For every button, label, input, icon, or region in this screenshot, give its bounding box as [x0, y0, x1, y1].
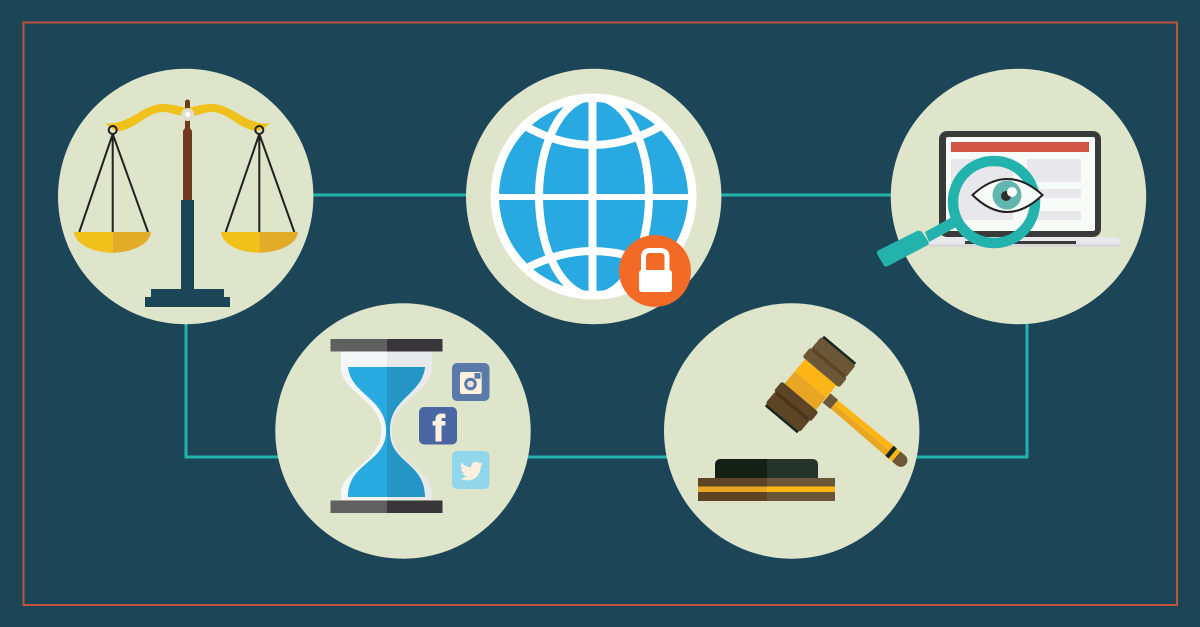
connector lines: [186, 195, 1027, 457]
scales stand: [145, 200, 230, 307]
globe: [490, 90, 697, 305]
laptop base: [928, 237, 1120, 247]
panel: globe with lock: [466, 69, 721, 324]
gavel hammer: [763, 334, 935, 500]
gavel handle: [822, 393, 910, 470]
scales post: [183, 100, 192, 200]
panel: hourglass and social media: [275, 303, 531, 559]
gavel head: [785, 359, 836, 410]
hourglass: [330, 339, 442, 513]
gavel lower cap: [763, 381, 819, 435]
magnifying glass: [877, 161, 1035, 267]
left pan: [74, 232, 151, 253]
icon: facebook: f: [432, 408, 446, 449]
panel: laptop and magnifier: [877, 69, 1146, 324]
panel: gavel: [664, 303, 935, 559]
sound block: [698, 459, 835, 501]
icon: twitter: [452, 451, 490, 489]
scales pivot: [181, 108, 194, 121]
laptop screen: [939, 131, 1101, 237]
scales beam: [105, 104, 270, 131]
right pan: [221, 232, 298, 253]
lock badge: [619, 235, 691, 307]
gavel upper cap: [802, 334, 858, 388]
icon: instagram: [452, 363, 490, 401]
panel: scales of justice: [58, 69, 313, 324]
left pan strings: [79, 126, 148, 232]
right pan strings: [226, 126, 294, 232]
icon: facebook: [419, 407, 457, 449]
eye: [972, 179, 1042, 212]
